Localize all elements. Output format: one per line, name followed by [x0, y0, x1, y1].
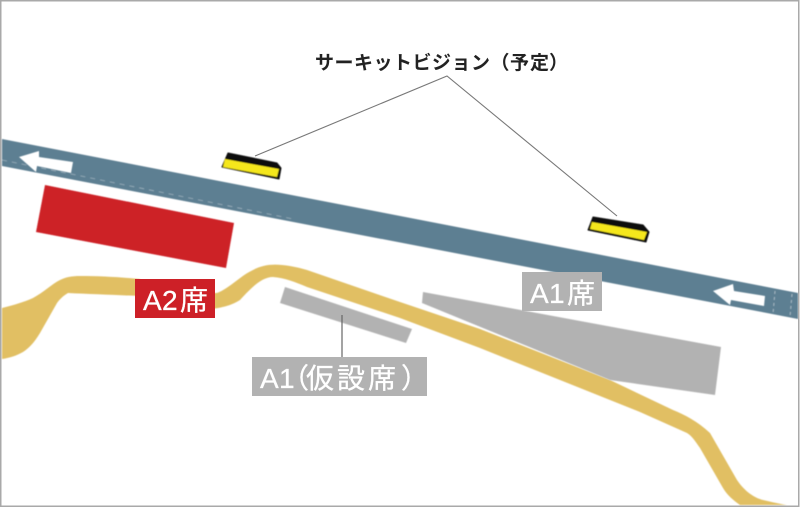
seating block: A1 main [422, 292, 721, 395]
road: curved yellow road [2, 265, 787, 505]
label: A1 temporary seats: A1（仮設席） [260, 363, 429, 394]
leader lines: screens to title [255, 76, 617, 216]
label: A1 seats: A1席 [530, 278, 595, 309]
seating block: A1 temporary [280, 287, 412, 343]
label: A1 seats [522, 272, 602, 311]
arrow: right end direction [713, 284, 765, 306]
label: A2 seats: A2席 [143, 285, 208, 316]
track: straight section [2, 139, 798, 319]
screen: right circuit vision [588, 217, 649, 242]
leader line: A1 temporary [341, 315, 343, 357]
screen: left circuit vision [222, 153, 281, 179]
title: circuit vision (planned): サーキットビジョン（予定） [315, 52, 568, 74]
A2 seating block [36, 185, 234, 268]
arrow: left end direction [19, 151, 73, 173]
label: A2 seats [135, 279, 215, 318]
